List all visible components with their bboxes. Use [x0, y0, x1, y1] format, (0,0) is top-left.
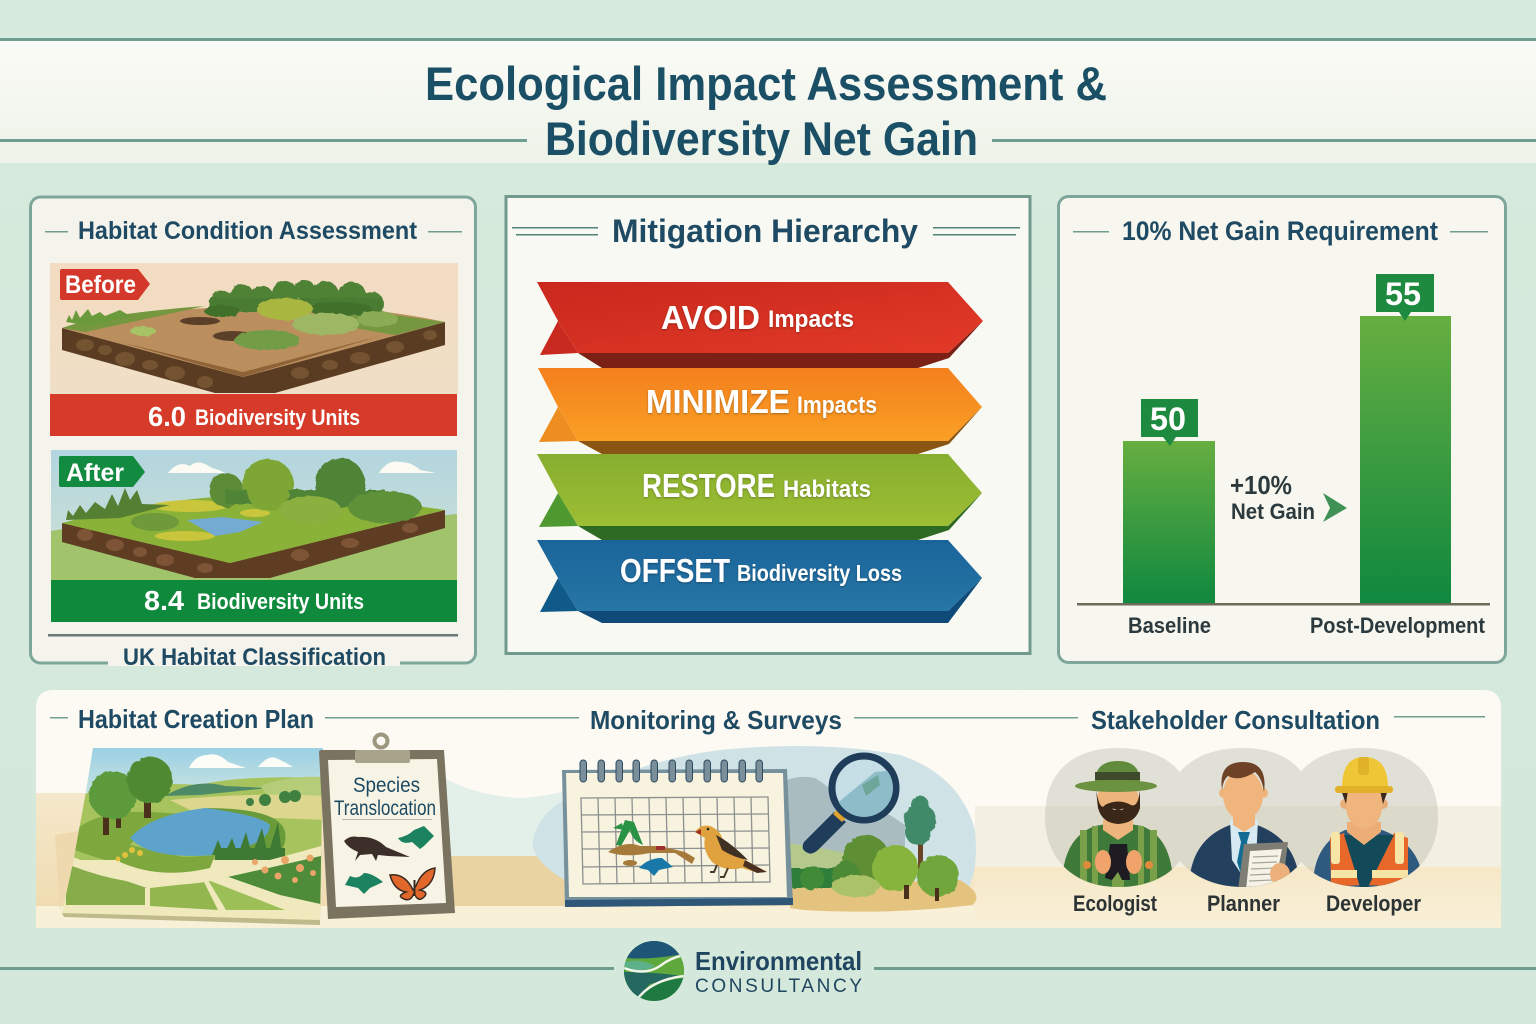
chevron: minimize: Impacts	[797, 392, 877, 419]
title: Ecological Impact Assessment &	[425, 57, 1107, 110]
before units bar: 6.0	[148, 401, 186, 432]
panel heading: habitat condition: Habitat Condition Assessment	[78, 217, 418, 245]
logo wordmark: CONSULTANCY	[695, 976, 862, 997]
rings	[580, 760, 762, 782]
before units bar: Biodiversity Units	[195, 405, 360, 430]
before scene	[50, 263, 458, 394]
net gain callout: Net Gain	[1231, 499, 1315, 524]
stakeholder labels	[1073, 891, 1421, 916]
illustration: habitat map	[55, 745, 330, 930]
bar: post-development	[1360, 274, 1451, 604]
chevron: avoid	[537, 282, 983, 368]
chevron: offset: Biodiversity Loss	[737, 560, 902, 586]
heading: stakeholder consultation: Stakeholder Consultation	[1091, 705, 1380, 735]
logo wordmark: Environmental	[695, 946, 862, 976]
chevron: restore: RESTORE	[642, 467, 775, 504]
species sketches	[608, 820, 695, 876]
chevron: avoid: AVOID	[661, 299, 760, 336]
strip background washes	[36, 775, 1501, 928]
after scene	[51, 450, 457, 580]
chevron: minimize: MINIMIZE	[646, 383, 790, 420]
after units bar: Biodiversity Units	[197, 589, 364, 614]
chevron: avoid: Impacts	[768, 306, 854, 333]
clipboard text: Species	[353, 774, 420, 797]
value label: 50: 50	[1150, 401, 1186, 437]
net gain callout	[1230, 470, 1347, 524]
axis label: baseline: Baseline	[1128, 613, 1211, 638]
value label: 55: 55	[1385, 276, 1421, 312]
chevron: offset: OFFSET	[620, 552, 730, 589]
illustration: monitoring landscape	[533, 746, 976, 912]
chevron: restore	[537, 454, 982, 540]
panel: habitat condition assessment	[30, 197, 476, 671]
clipboard text: Translocation	[334, 797, 436, 820]
panel: net gain requirement	[1058, 196, 1506, 662]
after units bar: 8.4	[144, 585, 184, 616]
panel: mitigation hierarchy	[506, 196, 1030, 654]
heading: monitoring and surveys: Monitoring & Surveys	[590, 705, 842, 735]
after tag	[59, 456, 145, 487]
before tag: Before	[65, 271, 136, 299]
axis label: post-development: Post-Development	[1310, 613, 1486, 638]
net gain callout: +10%	[1230, 470, 1292, 500]
panel heading: net gain: 10% Net Gain Requirement	[1122, 216, 1438, 246]
icon: survey calendar	[562, 760, 793, 907]
before units bar	[50, 394, 457, 436]
after units bar	[51, 580, 457, 622]
panel: bottom strip	[36, 690, 1501, 930]
value label: 55	[1376, 274, 1434, 321]
illustration: stakeholders	[1045, 748, 1438, 916]
chevron: restore: Habitats	[783, 476, 871, 503]
title	[425, 57, 1107, 165]
logo mark	[624, 941, 684, 1001]
icon: developer	[1313, 757, 1423, 887]
icon: magnifying glass	[803, 756, 896, 854]
stakeholder labels: Developer	[1326, 891, 1421, 916]
icon: clipboard species translocation	[319, 734, 455, 919]
header band	[0, 38, 1536, 163]
chevron: minimize	[538, 368, 982, 454]
logo wordmark	[695, 946, 862, 997]
bar: baseline	[1123, 399, 1215, 604]
grid	[581, 797, 770, 884]
value label: 50	[1141, 399, 1198, 446]
stakeholder labels: Ecologist	[1073, 891, 1158, 916]
title: Biodiversity Net Gain	[545, 112, 978, 165]
icon: bird	[695, 826, 767, 877]
stakeholder labels: Planner	[1207, 891, 1280, 916]
clipboard text	[334, 774, 436, 820]
icon: planner	[1189, 762, 1300, 890]
panel heading: mitigation hierarchy: Mitigation Hierarchy	[612, 213, 918, 249]
icon: ecologist	[1062, 761, 1173, 890]
icon: butterfly	[390, 868, 435, 900]
chevron: offset	[537, 540, 982, 623]
heading: habitat creation plan: Habitat Creation Plan	[78, 704, 314, 734]
after tag: After	[66, 459, 124, 487]
UK habitat classification caption: UK Habitat Classification	[123, 644, 386, 671]
footer rule	[0, 967, 1536, 970]
